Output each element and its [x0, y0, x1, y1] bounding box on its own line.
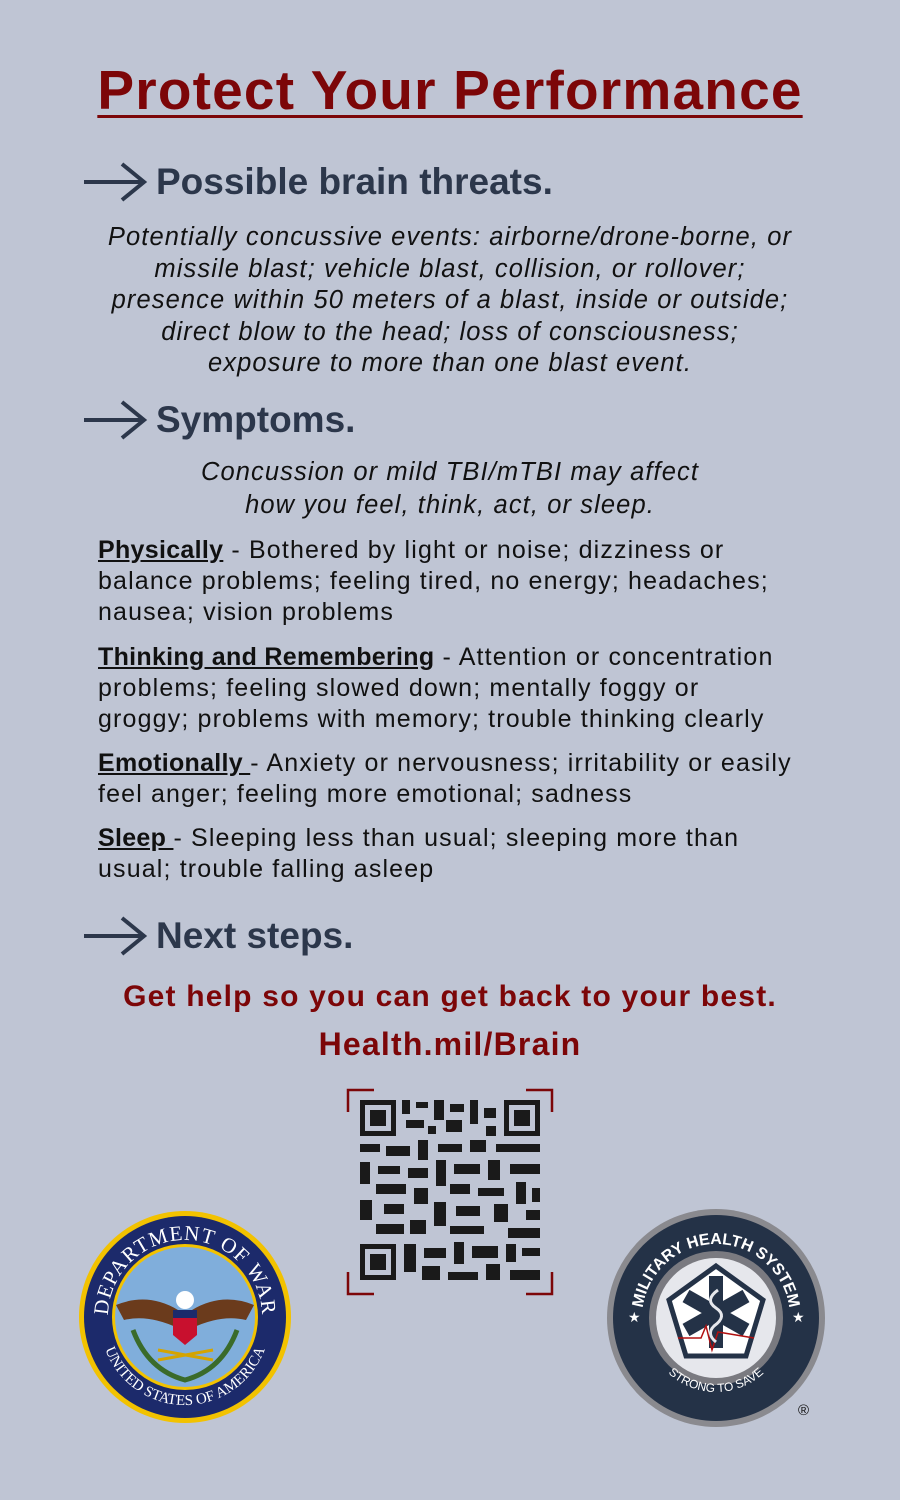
link text: Health.mil/Brain	[319, 1026, 581, 1062]
text: physically: Physically - Bothered by light or noise; dizziness or	[98, 536, 724, 564]
text: threats description: presence within 50 meters of a blast, inside or outside;	[112, 286, 788, 314]
heading: possible brain threats: Possible brain threats.	[156, 161, 553, 202]
text: thinking: groggy; problems with memory; trouble thinking clearly	[98, 705, 765, 733]
logo: Military Health System	[607, 1209, 825, 1427]
text: threats description: Potentially concussive events: airborne/drone-borne, or	[108, 223, 792, 251]
text: emotionally: feel anger; feeling more emotional; sadness	[98, 780, 632, 808]
heading: next steps: Next steps.	[156, 915, 353, 956]
text: thinking: Thinking and Remembering - Attention or concentration	[98, 643, 774, 671]
logo: Department of War seal	[79, 1211, 291, 1423]
QR code	[346, 1088, 554, 1296]
text: thinking: problems; feeling slowed down; mentally foggy or	[98, 674, 699, 702]
text: symptoms intro	[201, 458, 699, 519]
text: physically	[98, 536, 769, 626]
text: symptoms intro: how you feel, think, act, or sleep.	[245, 491, 655, 519]
text: sleep	[98, 824, 739, 883]
text: thinking	[98, 643, 774, 733]
logo: Department of War seal: DEPARTMENT OF WAR	[94, 1226, 276, 1315]
title: Protect Your Performance	[97, 59, 803, 121]
logo: Military Health System: ★	[628, 1309, 641, 1325]
logo: Military Health System: STRONG TO SAVE	[669, 1367, 764, 1392]
text: threats description: direct blow to the head; loss of consciousness;	[161, 318, 739, 346]
text: threats description: exposure to more than one blast event.	[208, 349, 692, 377]
text: emotionally: Emotionally - Anxiety or nervousness; irritability or easily	[98, 749, 792, 777]
text: symptoms intro: Concussion or mild TBI/mTBI may affect	[201, 458, 699, 486]
text: sleep: usual; trouble falling asleep	[98, 855, 434, 883]
logo: Military Health System: MILITARY HEALTH SYSTEM	[632, 1233, 800, 1307]
text: sleep: Sleep - Sleeping less than usual; sleeping more than	[98, 824, 739, 852]
logo: Department of War seal: UNITED STATES OF AMERICA	[106, 1346, 265, 1406]
logo: Military Health System: ★	[792, 1309, 805, 1325]
text: physically: balance problems; feeling tired, no energy; headaches;	[98, 567, 769, 595]
heading: symptoms: Symptoms.	[156, 399, 355, 440]
text: emotionally	[98, 749, 792, 808]
text: physically: nausea; vision problems	[98, 598, 394, 626]
registered mark: ®	[798, 1402, 809, 1419]
callout: get help: Get help so you can get back to your best.	[123, 980, 777, 1013]
text: threats description	[108, 223, 792, 377]
text: threats description: missile blast; vehicle blast, collision, or rollover;	[154, 254, 746, 282]
